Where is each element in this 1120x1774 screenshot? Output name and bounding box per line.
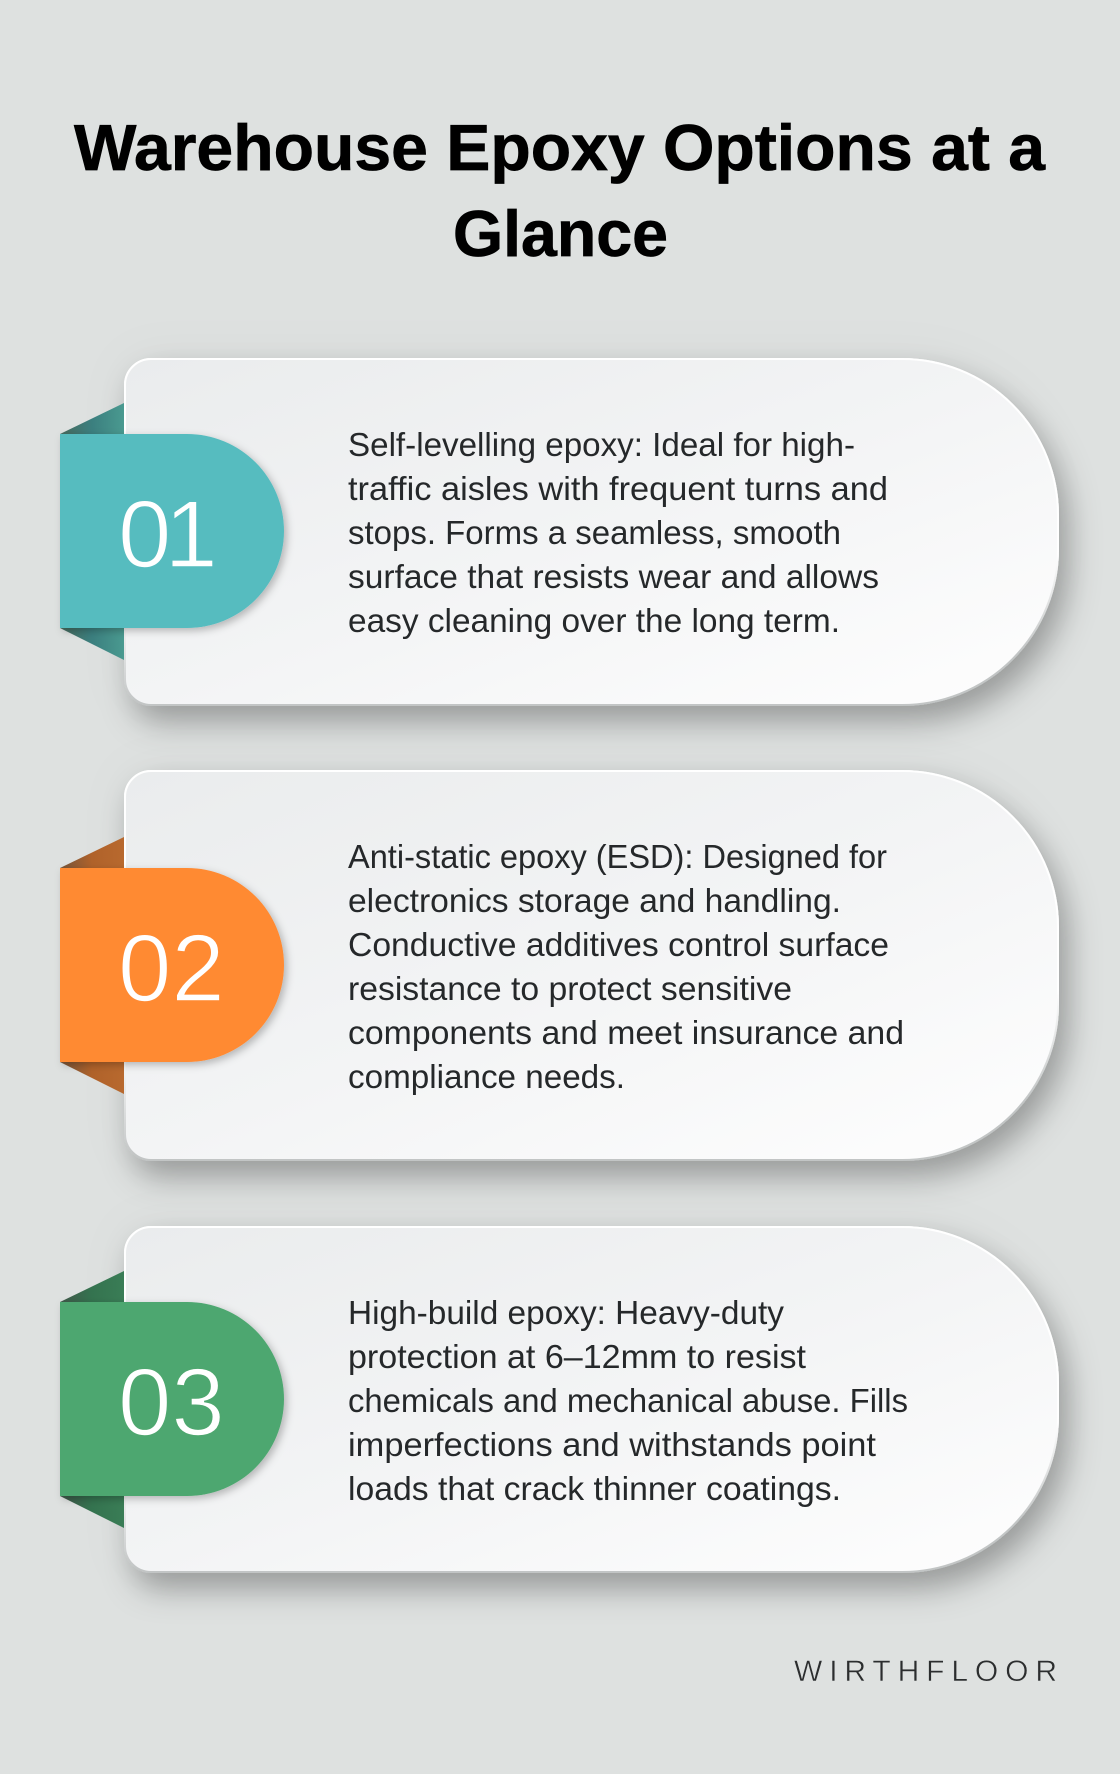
number tab 1 (60, 434, 284, 628)
text block 3: chemicals and mechanical abuse. Fills (348, 1382, 908, 1419)
text block 2 (348, 838, 904, 1095)
title (74, 111, 1046, 270)
text block 3 (348, 1294, 908, 1507)
text block 2: components and meet insurance and (348, 1014, 904, 1051)
number tab 2 (60, 868, 284, 1062)
text block 1: easy cleaning over the long term. (348, 602, 840, 639)
text block 2: electronics storage and handling. (348, 882, 841, 919)
text block 3: protection at 6–12mm to resist (348, 1338, 806, 1375)
panel: self-levelling epoxy (60, 359, 1058, 705)
text block 1 (348, 426, 888, 639)
panel: high-build epoxy (60, 1227, 1058, 1572)
number tab 3: 03 (118, 1349, 225, 1456)
number tab 2: 02 (118, 915, 225, 1022)
ribbon fold top 1 (60, 403, 124, 434)
panel: anti-static epoxy (60, 771, 1058, 1160)
ribbon fold top 2 (60, 837, 124, 868)
brand wordmark: WIRTHFLOOR (794, 1655, 1057, 1688)
text block 1: stops. Forms a seamless, smooth (348, 514, 841, 551)
text block 2: Conductive additives control surface (348, 926, 889, 963)
card background 2 (125, 771, 1058, 1160)
text block 1: Self-levelling epoxy: Ideal for high- (348, 426, 855, 463)
text block 2: resistance to protect sensitive (348, 970, 792, 1007)
number tab 3 (60, 1302, 284, 1496)
title: Warehouse Epoxy Options at a (74, 111, 1046, 184)
text block 2: Anti-static epoxy (ESD): Designed for (348, 838, 887, 875)
card background 1 (125, 359, 1058, 705)
text block 3: imperfections and withstands point (348, 1426, 876, 1463)
text block 1: traffic aisles with frequent turns and (348, 470, 888, 507)
text block 1: surface that resists wear and allows (348, 558, 879, 595)
ribbon fold top 3 (60, 1271, 124, 1302)
ribbon fold bottom 2 (60, 1062, 124, 1094)
text block 3: High-build epoxy: Heavy-duty (348, 1294, 785, 1331)
ribbon fold bottom 1 (60, 628, 124, 660)
ribbon fold bottom 3 (60, 1496, 124, 1528)
text block 2: compliance needs. (348, 1058, 625, 1095)
text block 3: loads that crack thinner coatings. (348, 1470, 841, 1507)
card background 3 (125, 1227, 1058, 1572)
title: Glance (453, 197, 668, 270)
number tab 1: 01 (118, 481, 218, 588)
